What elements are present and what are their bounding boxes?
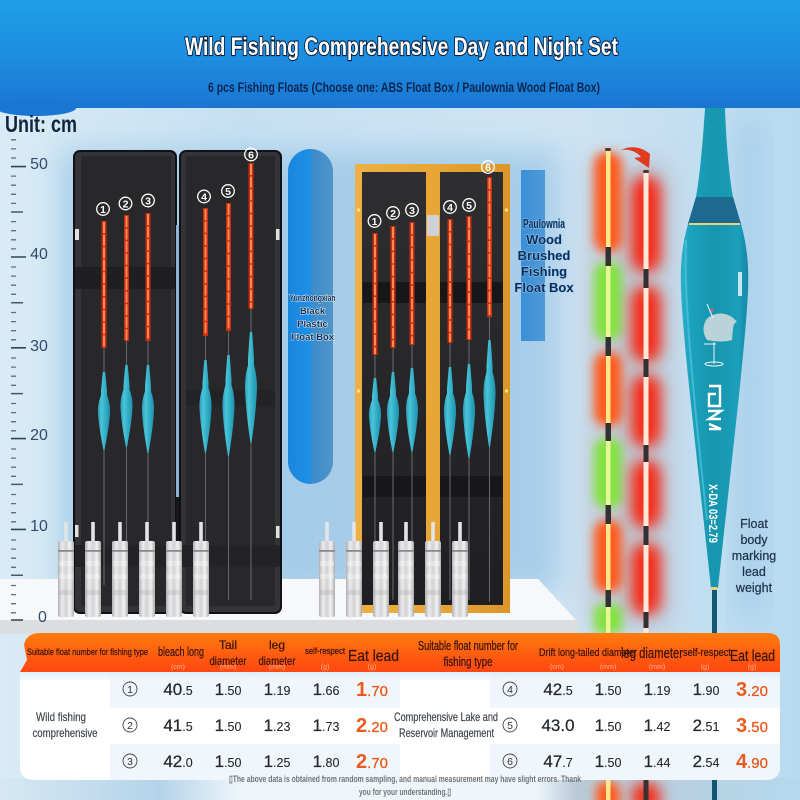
ruler: 50 xyxy=(30,156,48,173)
row group label right: Reservoir Management xyxy=(399,726,494,740)
float body marking note: Float xyxy=(740,517,768,531)
right data rows: 1.50 xyxy=(595,752,621,771)
left data rows: 1.80 xyxy=(313,752,339,771)
float number labels: 3 xyxy=(145,196,151,208)
table header: (cm) xyxy=(171,664,185,671)
left data rows: 1 xyxy=(127,684,133,696)
table header: Drift long-tailed diameter xyxy=(539,647,637,659)
wood float number labels: 6 xyxy=(485,162,491,174)
label panel: paulownia wood box xyxy=(514,170,574,341)
float 2 xyxy=(120,215,133,600)
wood float 6 xyxy=(483,177,496,602)
right data rows: 4.90 xyxy=(736,751,768,773)
right data rows: 1.50 xyxy=(595,716,621,735)
unit label: Unit: cm xyxy=(5,111,77,137)
left data rows: 1.25 xyxy=(264,752,290,771)
table header: bleach long xyxy=(158,645,204,659)
table header: diameter xyxy=(258,654,296,668)
table body xyxy=(20,672,780,780)
label panel: paulownia wood box: Paulownia xyxy=(523,216,565,231)
left data rows: 1.50 xyxy=(215,680,241,699)
footnote xyxy=(229,774,582,798)
arrow: curved red pointer xyxy=(621,147,650,168)
pale swath below table xyxy=(0,778,800,800)
left data rows xyxy=(123,679,388,773)
right data rows: 5 xyxy=(507,720,513,732)
label panel: paulownia wood box: Fishing xyxy=(521,264,567,279)
wood float 5 xyxy=(463,216,475,600)
float body lead marking: X-DA 03=2.79 xyxy=(706,484,718,543)
float tips continuing below table xyxy=(596,778,717,800)
battery row: black box set xyxy=(58,522,209,617)
float 1 xyxy=(98,221,110,585)
label panel: paulownia wood box: Brushed xyxy=(518,248,570,263)
right data rows: 47.7 xyxy=(543,752,573,771)
table header: (g) xyxy=(321,664,329,671)
label panel: black plastic box: Black xyxy=(300,306,326,317)
table header: (mm) xyxy=(600,664,616,671)
right data rows: 2.54 xyxy=(693,752,719,771)
float number labels: 1 xyxy=(100,204,106,216)
ruler: 30 xyxy=(30,338,48,355)
left data rows: 40.5 xyxy=(163,680,193,699)
wood float 3 xyxy=(406,222,418,600)
right data rows xyxy=(503,679,768,773)
left data rows: 41.5 xyxy=(163,716,193,735)
right data rows: 3.20 xyxy=(736,679,768,701)
left data rows: 3 xyxy=(127,756,133,768)
table header: Eat lead xyxy=(348,648,399,665)
ruler: 10 xyxy=(30,518,48,535)
right data rows: 1.50 xyxy=(595,680,621,699)
glowing float tip: orange and green xyxy=(594,148,622,800)
wood float number labels: 2 xyxy=(390,208,396,220)
float number labels xyxy=(97,148,257,216)
glowing float tip: red xyxy=(631,170,661,800)
wood float number labels: 3 xyxy=(409,205,415,217)
brand mark xyxy=(708,386,721,429)
wood float number labels: 5 xyxy=(466,200,472,212)
wood float 4 xyxy=(444,219,456,600)
ruler xyxy=(11,140,48,626)
float 4 xyxy=(199,208,212,600)
table header: Tail xyxy=(219,638,237,652)
wood float number labels: 1 xyxy=(372,216,378,228)
float 6 xyxy=(245,163,257,600)
wood float 2 xyxy=(387,226,399,600)
float 3 xyxy=(142,213,154,600)
white display shelf xyxy=(0,579,578,634)
wood float number labels xyxy=(368,161,494,228)
label panel: paulownia wood box: Wood xyxy=(526,232,562,247)
float number labels: 2 xyxy=(123,198,129,210)
label panel: paulownia wood box: Float Box xyxy=(514,280,574,295)
top banner xyxy=(0,0,800,116)
left data rows: 1.50 xyxy=(215,716,241,735)
left data rows: 2 xyxy=(127,720,133,732)
left data rows: 2.20 xyxy=(356,715,388,737)
panel: specification table xyxy=(20,633,780,780)
ruler: 20 xyxy=(30,427,48,444)
table header: Suitable float number for xyxy=(418,639,518,653)
table header: (mm) xyxy=(649,664,665,671)
table header: Eat lead xyxy=(730,648,775,665)
panel: black plastic float box xyxy=(73,148,282,614)
right data rows: 3.50 xyxy=(736,715,768,737)
right data rows: 1.19 xyxy=(644,680,670,699)
left data rows: 1.70 xyxy=(356,679,388,701)
row group label left: comprehensive xyxy=(32,726,98,740)
footnote: you for your understanding.▯ xyxy=(359,787,451,798)
large float close-up xyxy=(681,108,748,800)
right data rows: 1.44 xyxy=(644,752,670,771)
wood float 1 xyxy=(369,233,381,600)
pale glow wash between float tips xyxy=(590,160,670,630)
table header: (g) xyxy=(748,664,756,671)
left data rows: 1.19 xyxy=(264,680,290,699)
blue shadow behind large float xyxy=(735,120,765,620)
left data rows: 42.0 xyxy=(163,752,193,771)
table header: Suitable float number for fishing type xyxy=(27,647,148,658)
left data rows: 1.73 xyxy=(313,716,339,735)
footnote: ▯The above data is obtained from random sampling, and manual measurement may have slight errors. Thank xyxy=(229,774,582,785)
panel: paulownia wood float box xyxy=(355,161,510,613)
label panel: black plastic box: Plastic xyxy=(297,319,328,330)
table header: (mm) xyxy=(269,664,285,671)
table header: self-respect xyxy=(305,646,345,657)
label panel: black plastic box: Float Box xyxy=(291,332,335,343)
table header: self-respect xyxy=(683,647,731,659)
title: Wild Fishing Comprehensive Day and Night Set xyxy=(185,33,619,61)
left data rows: 1.66 xyxy=(313,680,339,699)
row group label left: Wild fishing xyxy=(36,710,86,724)
table header: (g) xyxy=(701,664,709,671)
left data rows: 1.23 xyxy=(264,716,290,735)
float 5 xyxy=(222,203,235,600)
label panel: black plastic box xyxy=(288,149,336,484)
float body marking note: weight xyxy=(735,581,773,595)
right data rows: 1.90 xyxy=(693,680,719,699)
wood float number labels: 4 xyxy=(447,202,453,214)
float body marking note: body xyxy=(740,533,768,547)
right data rows: 6 xyxy=(507,756,513,768)
blue shadow behind float boxes xyxy=(60,150,560,590)
ruler: 0 xyxy=(38,609,47,626)
right data rows: 42.5 xyxy=(543,680,573,699)
table header: leg diameter xyxy=(621,645,683,662)
float number labels: 6 xyxy=(248,150,254,162)
right data rows: 1.42 xyxy=(644,716,670,735)
crane emblem xyxy=(704,304,737,366)
float body marking note: marking xyxy=(732,549,776,563)
table header xyxy=(20,633,780,672)
float body marking note xyxy=(732,517,776,595)
left data rows: 2.70 xyxy=(356,751,388,773)
table header: (g) xyxy=(368,664,376,671)
float number labels: 5 xyxy=(225,186,231,198)
table header: (cm) xyxy=(550,664,564,671)
battery row: wood box set xyxy=(319,522,468,617)
float body marking note: lead xyxy=(742,565,766,579)
table header: diameter xyxy=(210,654,247,668)
subtitle: 6 pcs Fishing Floats (Choose one: ABS Float Box / Paulownia Wood Float Box) xyxy=(208,80,600,95)
label panel: black plastic box: Yunzhongxian xyxy=(290,293,336,304)
ruler: 40 xyxy=(30,246,48,263)
table header: (mm) xyxy=(220,664,236,671)
row group label right: Comprehensive Lake and xyxy=(394,710,498,724)
table header: fishing type xyxy=(444,655,493,669)
right data rows: 43.0 xyxy=(541,716,575,735)
row group label left xyxy=(32,710,98,740)
left data rows: 1.50 xyxy=(215,752,241,771)
table header: leg xyxy=(269,638,285,652)
right data rows: 4 xyxy=(507,684,513,696)
float number labels: 4 xyxy=(201,192,207,204)
right data rows: 2.51 xyxy=(693,716,719,735)
row group label right xyxy=(394,710,498,740)
